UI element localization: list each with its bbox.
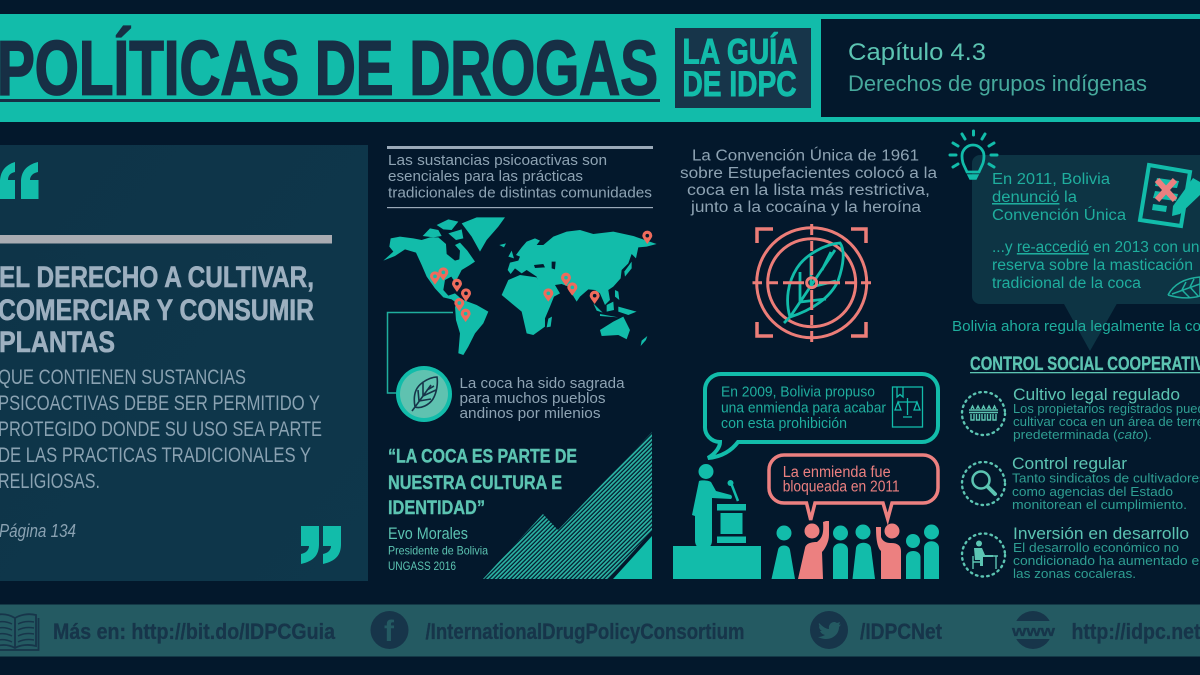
icon: small leaf (1168, 277, 1200, 298)
item: development investment: las zonas cocaleras. (1013, 566, 1136, 581)
divider bar (0, 235, 332, 244)
quote body: PROTEGIDO DONDE SU USO SEA PARTE (0, 418, 322, 441)
icon: speaker at podium (673, 464, 761, 579)
icon: crowd (772, 521, 939, 579)
chapter box (821, 19, 1200, 117)
badge: la guía de idpc: LA GUÍA (682, 32, 798, 72)
evo morales quote: Presidente de Bolivia (388, 544, 488, 558)
convention text: coca en la lista más restrictiva, (687, 182, 930, 199)
header band (0, 14, 1200, 122)
coca caption: La coca ha sido sagrada (460, 375, 625, 392)
icon: twitter (810, 611, 848, 649)
icon: book (0, 614, 38, 650)
evo morales quote (388, 446, 577, 573)
speech bubble: blocked in 2011: bloqueada en 2011 (783, 478, 900, 496)
speech bubble: 2009 amendment: con esta prohibición (721, 415, 847, 432)
quote heading (0, 261, 314, 359)
denunciation text: En 2011, Bolivia (992, 171, 1110, 188)
icon: law book (892, 387, 922, 427)
convention text: junto a la cocaína y la heroína (690, 199, 921, 216)
item: development investment (962, 524, 1200, 581)
world map (383, 217, 657, 355)
icon: crops (962, 392, 1005, 435)
panel: bolivia (950, 131, 1200, 581)
coca caption (460, 375, 625, 422)
icon: light bulb (950, 131, 997, 179)
denunciation text: denunció la (992, 189, 1077, 206)
quote heading: COMERCIAR Y CONSUMIR (0, 294, 314, 327)
title: POLÍTICAS DE DROGAS (0, 26, 658, 112)
icon: coca leaf badge (396, 366, 452, 422)
convention text (680, 148, 937, 216)
chapter box: Derechos de grupos indígenas (848, 71, 1147, 96)
connector line (388, 312, 453, 393)
coca caption: andinos por milenios (460, 405, 600, 422)
convention text: La Convención Única de 1961 (692, 148, 919, 164)
badge: la guía de idpc (675, 28, 811, 108)
title underline (0, 99, 660, 102)
lower rule (387, 207, 653, 208)
speech bubble: 2009 amendment: una enmienda para acabar (721, 400, 886, 416)
icon: web: www (1011, 623, 1055, 640)
denunciation text: tradicional de la coca (992, 275, 1141, 292)
item: development investment: El desarrollo económico no (1013, 540, 1179, 555)
evo morales quote: Evo Morales (388, 524, 468, 543)
convention text: sobre Estupefacientes colocó a la (680, 165, 937, 182)
chapter box: Capítulo 4.3 (848, 39, 986, 66)
speech bubble: 2009 amendment (705, 374, 938, 458)
link: twitter: /IDPCNet (860, 619, 943, 644)
panel: convention (673, 148, 939, 579)
callout bubble (972, 155, 1200, 351)
speech bubble: blocked in 2011: La enmienda fue (783, 464, 891, 481)
item: regulated cultivation: predeterminada ( cato). (1013, 427, 1152, 442)
item: regular control: monitorean el cumplimiento. (1012, 497, 1187, 512)
icon: crossed document (1140, 165, 1200, 226)
item: regulated cultivation: Cultivo legal regulado (1013, 385, 1180, 404)
icon: facebook (370, 611, 408, 649)
footer band (0, 604, 1200, 656)
icon: magnifier (962, 462, 1005, 505)
item: regulated cultivation (962, 385, 1200, 442)
item: regular control: Tanto sindicatos de cultivadores (1012, 471, 1200, 486)
denunciation text (992, 171, 1200, 292)
quote body: RELIGIOSAS. (0, 470, 100, 493)
quote body (0, 366, 322, 493)
denunciation text: Convención Única (992, 207, 1126, 224)
evo morales quote: UNGASS 2016 (388, 559, 456, 573)
evo morales quote: NUESTRA CULTURA E (388, 472, 562, 494)
link: facebook: /InternationalDrugPolicyConsortium (426, 619, 744, 644)
item: development investment: Inversión en desarrollo (1013, 524, 1189, 543)
intro text (388, 153, 652, 202)
coca caption: para muchos pueblos (460, 390, 606, 407)
intro text: tradicionales de distintas comunidades (388, 186, 652, 202)
speech bubble: blocked in 2011 (769, 455, 938, 520)
icon: opening quote (0, 162, 38, 199)
hatched mountains (483, 432, 652, 579)
icon: web (1010, 611, 1056, 649)
icon: closing quote (301, 526, 341, 564)
evo morales quote: IDENTIDAD” (388, 497, 485, 519)
quote body: DE LAS PRACTICAS TRADICIONALES Y (0, 444, 311, 467)
top rule (387, 146, 653, 149)
page reference: Página 134 (0, 521, 76, 541)
quote body: PSICOACTIVAS DEBE SER PERMITIDO Y (0, 392, 320, 415)
panel: world map column (383, 146, 657, 579)
intro text: esenciales para las prácticas (388, 169, 583, 185)
badge: la guía de idpc: DE IDPC (682, 65, 796, 104)
item: regular control: como agencias del Estado (1012, 484, 1173, 499)
denunciation text: reserva sobre la masticación (992, 257, 1193, 274)
map pins (430, 231, 652, 322)
item: development investment: condicionado ha aumentado en (1013, 553, 1200, 568)
evo morales quote: “LA COCA ES PARTE DE (388, 446, 577, 468)
panel: quote (0, 145, 368, 581)
link: guide: Más en: http://bit.do/IDPCGuia (53, 619, 336, 644)
intro text: Las sustancias psicoactivas son (388, 153, 607, 169)
quote body: QUE CONTIENEN SUSTANCIAS (0, 366, 246, 389)
item: regular control (962, 454, 1200, 512)
item: regular control: Control regular (1012, 454, 1127, 473)
icon: targeted leaf (752, 224, 871, 342)
icon: facebook: f (384, 615, 395, 648)
quote heading: EL DERECHO A CULTIVAR, (0, 261, 314, 294)
quote heading: PLANTAS (0, 326, 115, 359)
speech bubble: 2009 amendment: En 2009, Bolivia propuso (721, 384, 875, 400)
icon: person at desk (962, 534, 1005, 576)
